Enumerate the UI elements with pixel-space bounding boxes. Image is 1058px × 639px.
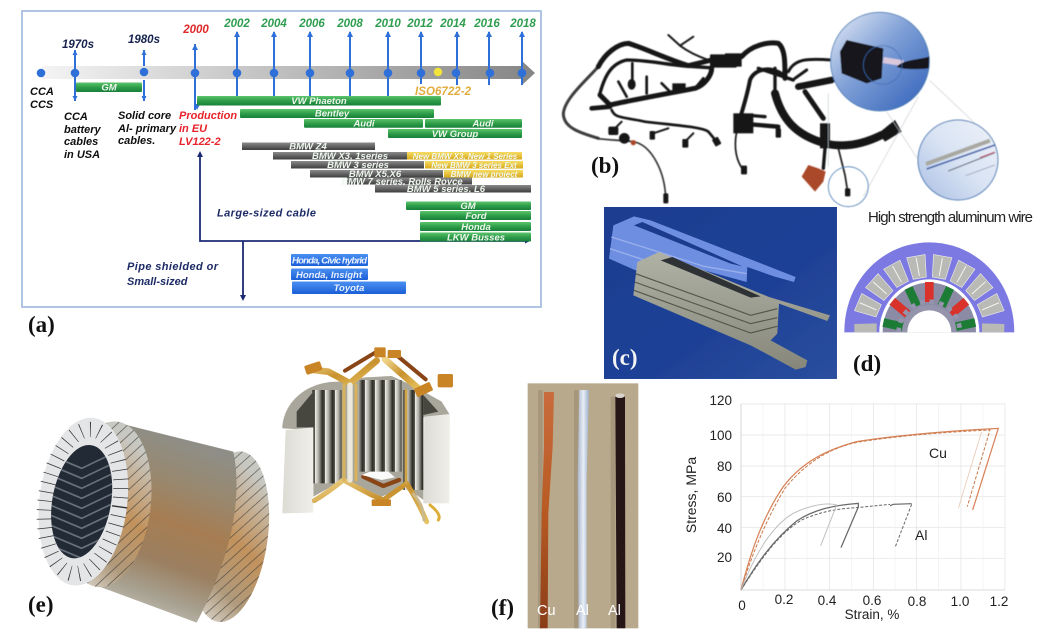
- bar labels: [537, 603, 621, 619]
- pin ends: [304, 347, 453, 506]
- ring slot ticks: [36, 425, 130, 579]
- left side notes: CCS: [30, 99, 54, 111]
- label b: (b): [591, 153, 619, 178]
- panel (a): aluminium wiring timeline: [22, 11, 541, 307]
- front ring: [29, 413, 137, 591]
- year labels: 2018: [509, 18, 536, 30]
- blue bars: small cable programmes: Honda, Civic hybrid: [292, 256, 367, 266]
- gray and yellow BMW bars: BMW 5 series, L6: [407, 184, 486, 195]
- year labels: 1970s: [62, 39, 94, 51]
- y axis tick labels: 100: [709, 428, 732, 443]
- left side notes: CCA: [64, 111, 88, 123]
- y axis tick labels: 60: [717, 490, 732, 505]
- curve labels: Al: [915, 527, 927, 543]
- green bars: large cable programmes: Audi: [471, 118, 494, 130]
- left side notes: cables: [64, 136, 98, 148]
- back yoke: [282, 376, 450, 500]
- rotor air gap: [879, 279, 979, 332]
- gray and yellow BMW bars: BMW 3 series: [327, 160, 389, 171]
- x axis tick labels: 0.2: [775, 592, 793, 607]
- green bars: large cable programmes: Bentley: [315, 108, 350, 120]
- curve labels: [915, 445, 947, 543]
- bar labels: Cu: [537, 603, 556, 619]
- coated aluminium bar: [615, 397, 625, 628]
- year labels: 2016: [473, 18, 500, 30]
- detail circle: connector: [831, 12, 929, 111]
- year labels: 2010: [374, 18, 401, 30]
- left side notes: Solid core: [118, 110, 171, 122]
- Al curves: [741, 503, 912, 590]
- x axis tick labels: [738, 592, 1008, 613]
- green bars: large-sized cable: GM: [460, 201, 477, 212]
- year labels: 2008: [336, 18, 363, 30]
- gray and yellow BMW bars: BMW X3, 1series: [312, 151, 388, 162]
- bar labels: Al: [608, 603, 621, 619]
- copper bar: [540, 392, 554, 628]
- green bars: large cable programmes: VW Group: [432, 129, 478, 140]
- navy large/small cable arrows: [197, 151, 530, 301]
- y axis tick labels: 80: [717, 459, 732, 474]
- green bars: large cable programmes: Audi: [352, 118, 375, 130]
- inner gear: [899, 302, 960, 332]
- left side notes: [30, 86, 237, 161]
- copper hairpins: [313, 353, 439, 522]
- grid: [741, 404, 1005, 590]
- label f: (f): [491, 595, 514, 620]
- gray and yellow BMW bars: BMW Z4: [289, 142, 327, 152]
- green bars: large-sized cable: [406, 201, 531, 244]
- left side notes: CCA: [30, 86, 54, 98]
- blue bars: small cable programmes: [291, 254, 406, 294]
- rotor magnets: [882, 282, 976, 331]
- Cu curves: [741, 428, 998, 590]
- x axis tick labels: 1.0: [951, 594, 969, 609]
- x axis tick labels: 0.8: [908, 594, 926, 609]
- green bars: large-sized cable: Ford: [465, 211, 487, 222]
- white gap: [362, 472, 395, 480]
- shadows: [538, 390, 615, 628]
- rear section: [181, 446, 279, 627]
- blue coil stack: [609, 216, 796, 282]
- green bars: large-sized cable: Honda: [461, 222, 491, 233]
- year labels: 2000: [182, 24, 209, 36]
- drum body: [95, 423, 237, 623]
- x axis title: Strain, %: [845, 607, 899, 622]
- blue bars: small cable programmes: Toyota: [334, 283, 364, 294]
- y axis tick labels: 120: [709, 393, 732, 408]
- left side notes: in EU: [179, 123, 208, 135]
- bar labels: Al: [576, 603, 589, 619]
- connection lines to details: [828, 81, 977, 197]
- yellow ISO marker: [434, 68, 442, 76]
- timeline arrow band: [42, 61, 535, 85]
- year labels: 1980s: [128, 34, 160, 46]
- left side notes: Production: [179, 110, 237, 122]
- label d: (d): [853, 351, 881, 376]
- wire caption: High strength aluminum wire: [868, 209, 1033, 226]
- gray and yellow BMW bars: BMW new project: [451, 170, 518, 179]
- harness right section: [725, 43, 902, 196]
- label a: (a): [28, 312, 55, 337]
- panel (e): stator drum: [36, 418, 270, 622]
- green bars: large cable programmes: GM: [101, 82, 118, 94]
- front slotted section: [54, 416, 160, 592]
- left side notes: LV122-2: [179, 136, 221, 148]
- year labels: 2006: [298, 18, 325, 30]
- large-sized cable label: Large-sized cable: [217, 208, 316, 220]
- x axis tick labels: 0.6: [863, 593, 881, 608]
- aluminium bar: [578, 390, 589, 628]
- gray and yellow BMW bars: New BMW 3 series Ext: [431, 161, 517, 170]
- x axis tick labels: 1.2: [990, 594, 1008, 609]
- stator blocks: [282, 427, 313, 513]
- blue bars: small cable programmes: Honda, Insight: [296, 270, 363, 281]
- bore: [51, 445, 112, 558]
- stator yoke: [844, 242, 1014, 332]
- gray and yellow BMW bars: New BMW X3, New 1 Series: [413, 152, 518, 161]
- rotor core: [883, 283, 976, 332]
- x axis tick labels: 0: [738, 598, 746, 613]
- y axis tick labels: 40: [717, 521, 732, 536]
- stator slots: [854, 255, 1004, 332]
- panel (b): wiring harness with aluminium wire details: [563, 12, 998, 207]
- label e: (e): [28, 592, 54, 617]
- fins: [297, 380, 438, 490]
- y axis title: Stress, MPa: [683, 457, 699, 533]
- year labels: 2012: [406, 18, 433, 30]
- stress-strain chart: [741, 404, 1005, 590]
- harness left section: [563, 35, 737, 203]
- green bars: large cable programmes: [76, 82, 522, 140]
- year labels: 2004: [260, 18, 287, 30]
- x axis tick labels: 0.4: [818, 593, 837, 608]
- year labels: 2014: [439, 18, 466, 30]
- pipe shielded label: Pipe shielded or: [127, 261, 219, 273]
- y axis tick labels: [709, 393, 732, 565]
- panel (d): motor cross-section: [844, 242, 1014, 332]
- gray coil stack: [633, 252, 830, 370]
- gray and yellow BMW bars: BMW X5,X6: [349, 169, 402, 180]
- gray and yellow BMW bars: [242, 142, 531, 195]
- green bars: large cable programmes: VW Phaeton: [291, 96, 347, 107]
- red terminal cover: [802, 165, 826, 192]
- year labels: [62, 18, 536, 51]
- year markers: [37, 31, 526, 110]
- pipe shielded label: Small-sized: [127, 276, 188, 288]
- left side notes: battery: [64, 124, 102, 136]
- axes: [741, 404, 1005, 590]
- panel (c): aluminium hairpin coils: [604, 207, 837, 379]
- y axis tick labels: 20: [717, 550, 732, 565]
- curve labels: Cu: [929, 445, 947, 461]
- ISO standard label: ISO6722-2: [415, 86, 472, 98]
- panel (f): conductor photograph: [528, 383, 638, 628]
- left side notes: Al- primary: [117, 123, 177, 135]
- gray and yellow BMW bars: BMW 7 series, Rolls Royce: [341, 176, 463, 188]
- green bars: large-sized cable: LKW Busses: [447, 232, 505, 244]
- hairpin stator cutaway: [282, 347, 453, 522]
- pipe shielded label: [127, 261, 219, 288]
- left side notes: in USA: [64, 149, 100, 161]
- detail circle: wire strands: [918, 120, 998, 200]
- small circle: [828, 167, 868, 207]
- label c: (c): [612, 345, 638, 370]
- year labels: 2002: [223, 18, 250, 30]
- left side notes: cables.: [118, 135, 155, 147]
